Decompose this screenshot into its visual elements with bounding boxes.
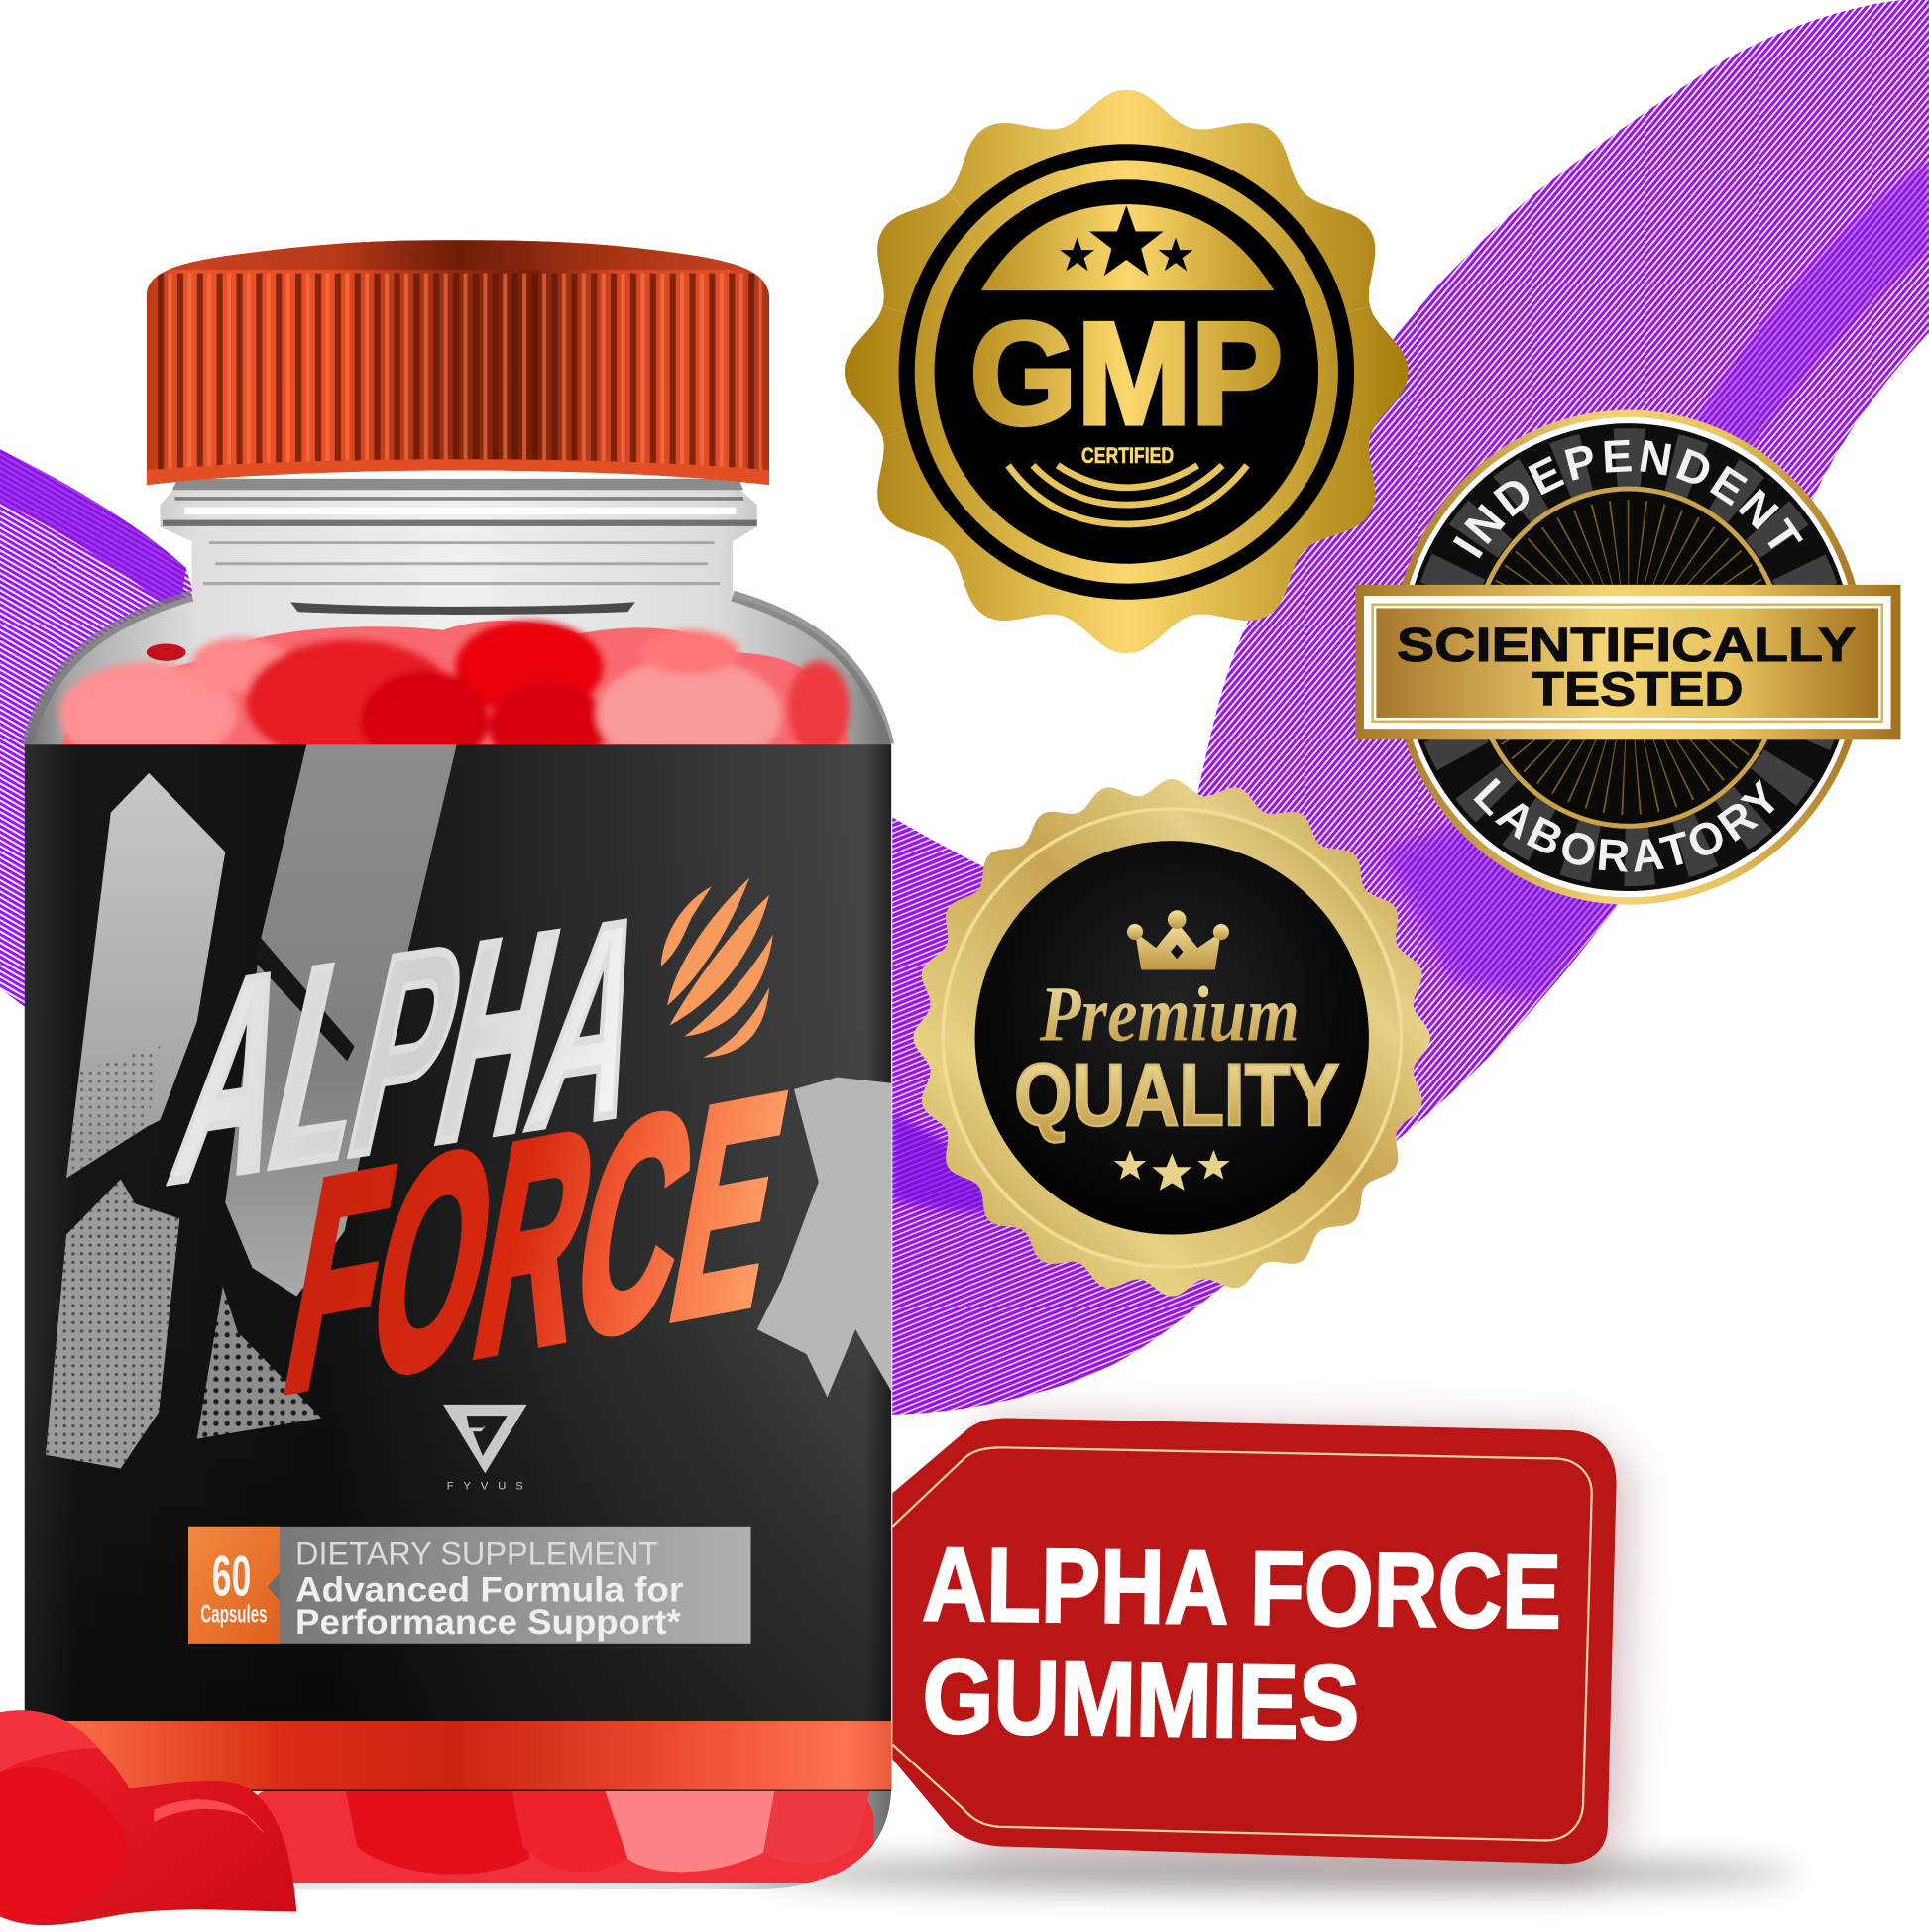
dome with stars (981, 204, 1274, 290)
ring segments (1437, 458, 1819, 856)
gold ribbon: TESTED (1532, 663, 1743, 717)
Premium script: Premium (1039, 970, 1300, 1058)
label grey camouflage shapes (46, 744, 891, 1468)
gold ribbon: SCIENTIFICALLY (1397, 619, 1856, 672)
certified text: CERTIFIED (1081, 443, 1174, 468)
brand logo: FYVUS (447, 1481, 533, 1493)
LABORATORY arc text: LABORATORY (1473, 777, 1774, 872)
QUALITY text: QUALITY (1014, 1045, 1339, 1144)
sunburst rays (1547, 571, 1710, 743)
capsule count and claim box: Advanced Formula for (295, 1572, 683, 1610)
tag shadow (972, 1419, 1631, 1877)
FORCE wordmark: FORCE (267, 1029, 805, 1455)
gold ribbon (1355, 585, 1900, 739)
icon: crown (1127, 910, 1229, 970)
badge: premium quality (911, 777, 1433, 1299)
GMP text: GMP (970, 292, 1283, 455)
badge: independent laboratory scientifically tested (1355, 410, 1901, 905)
capsule count and claim box: Capsules (200, 1602, 267, 1629)
badge: GMP certified (844, 88, 1410, 655)
capsule count and claim box (188, 1527, 751, 1644)
capsule count and claim box: DIETARY SUPPLEMENT (295, 1535, 658, 1571)
bottle cap (147, 240, 769, 487)
brand logo (443, 1405, 533, 1493)
tag title text: ALPHA FORCE (922, 1526, 1562, 1650)
gummies inside jar bottom (246, 1785, 874, 1883)
capsule count and claim box: Performance Support* (295, 1604, 681, 1642)
capsule count and claim box: 60 (212, 1544, 251, 1608)
bottle (25, 240, 891, 1889)
INDEPENDENT arc text: INDEPENDENT (1453, 440, 1803, 559)
tag title text: GUMMIES (922, 1638, 1360, 1762)
tag title text (922, 1526, 1562, 1762)
icon: claw marks (661, 877, 773, 1058)
ALPHA wordmark: ALPHA (153, 856, 675, 1243)
glass neck and shoulders (25, 478, 891, 1889)
purple wave ribbon (0, 0, 1929, 1415)
ground shadow under jar and tag (763, 1857, 1797, 1890)
label (25, 744, 891, 1791)
stars (1114, 1150, 1230, 1191)
red name tag (892, 1419, 1617, 1864)
loose gummies (0, 1710, 296, 1925)
arcs (1008, 465, 1247, 524)
gummies inside jar top (54, 615, 854, 745)
orange band (25, 1721, 891, 1790)
